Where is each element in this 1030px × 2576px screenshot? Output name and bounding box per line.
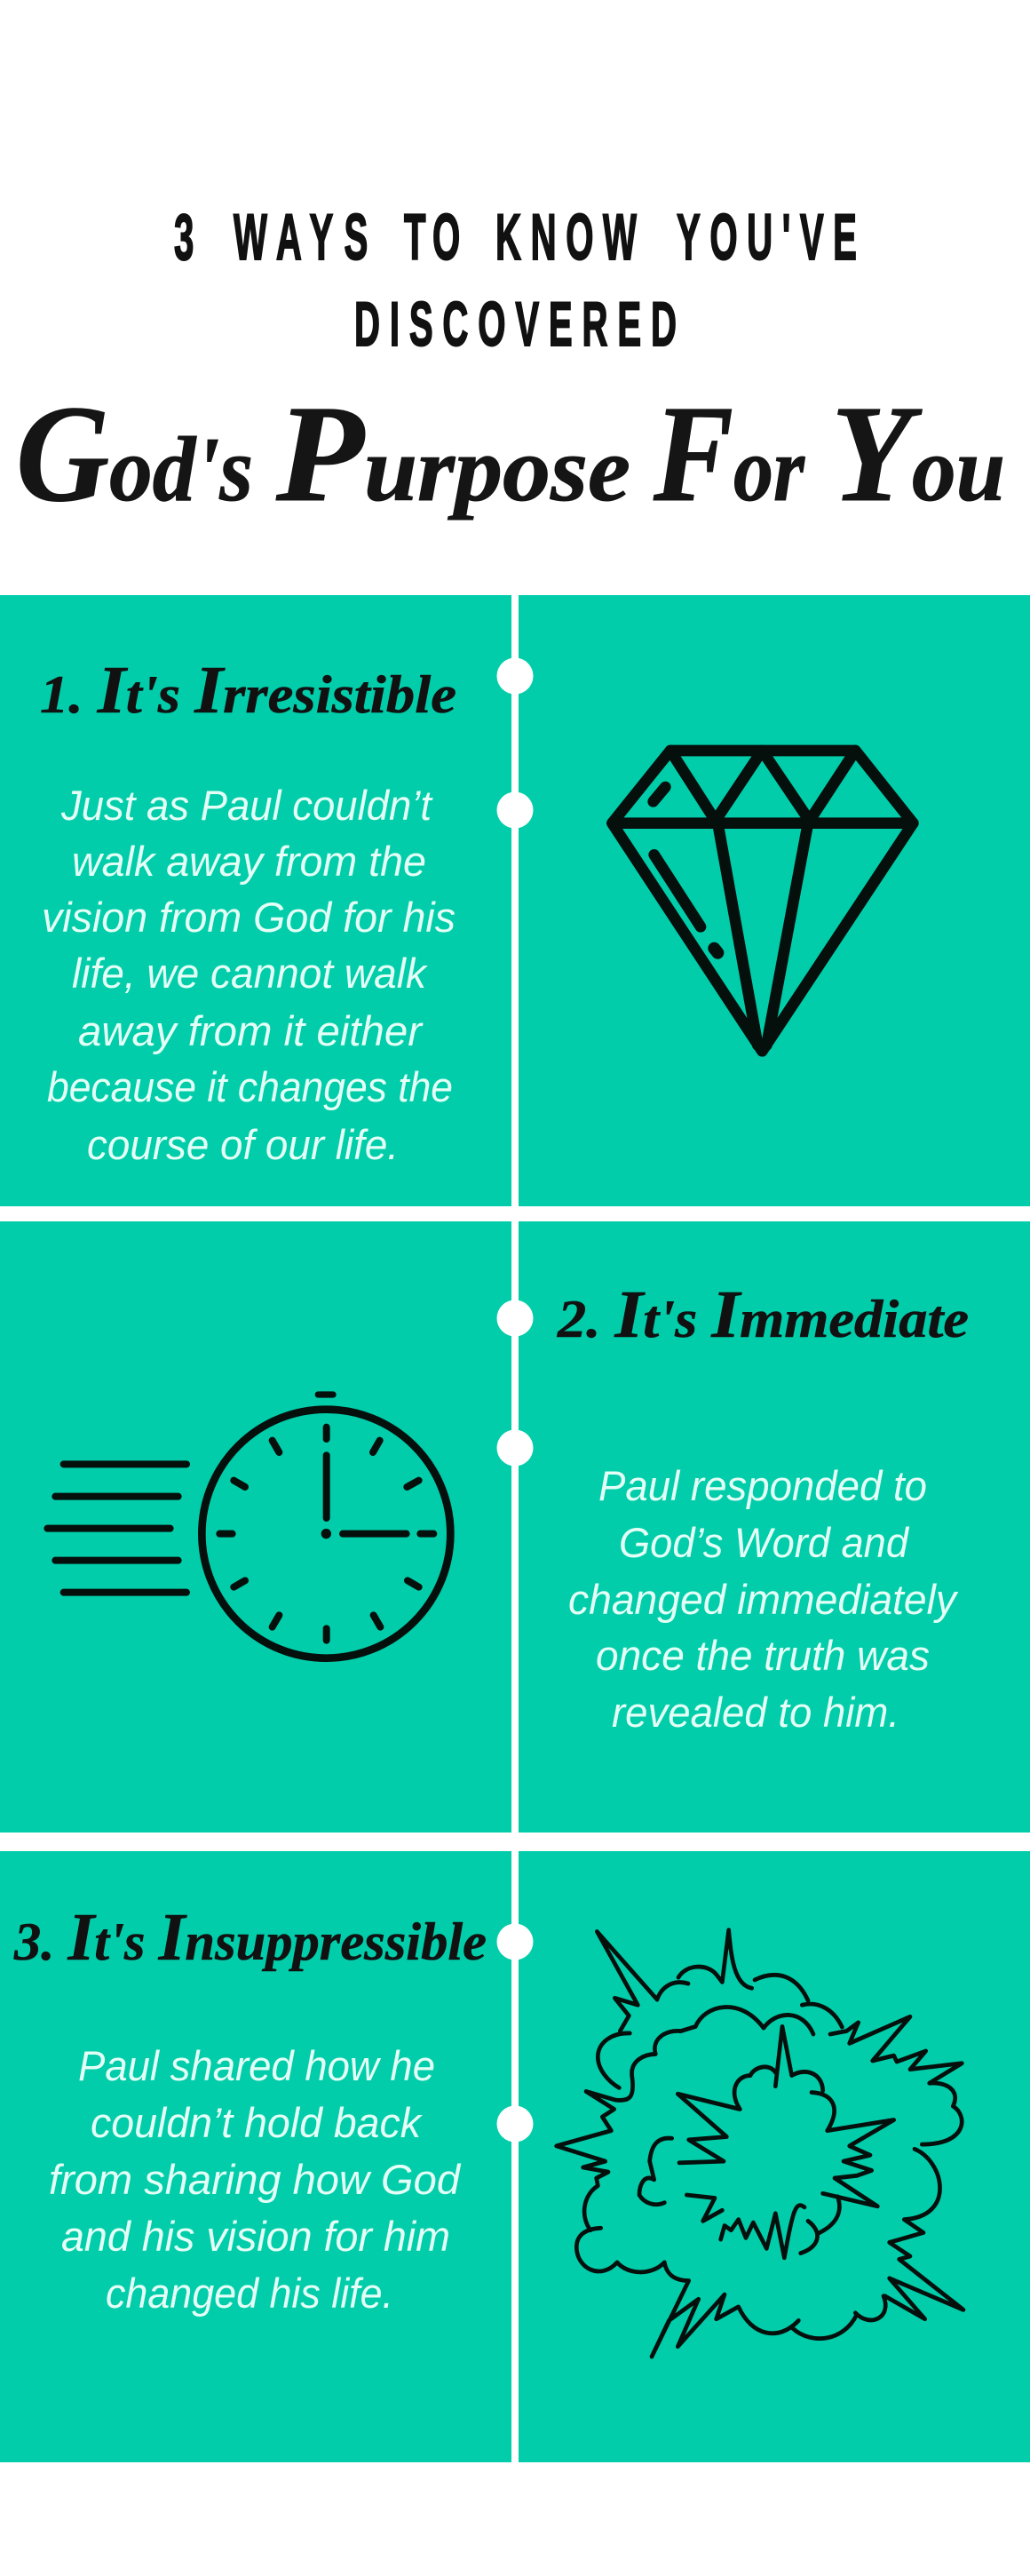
heading: it's irresistible: 1. It's Irresistible [40,653,456,727]
body text: walk away from the [72,838,426,885]
script title: For [653,377,805,530]
body text [49,2042,462,2317]
body text: life, we cannot walk [72,950,428,997]
dot [497,1430,533,1466]
panel background right [519,595,1030,1206]
panel: 1 irresistible [0,595,1030,1206]
body text [42,782,456,1168]
title line 1: WAYS [234,203,368,274]
body text: couldn’t hold back [91,2099,423,2146]
panel background left [0,1221,511,1833]
timeline divider with dots [497,595,533,2462]
title [16,203,1005,530]
body text: God’s Word and [619,1519,910,1566]
panel: 3 insuppressible [0,1851,1030,2462]
panel background right [519,1221,1030,1833]
body text: because it changes the [47,1063,453,1110]
title line 1 [174,203,857,274]
dot [497,657,533,695]
body text: Just as Paul couldn’t [60,782,433,829]
title line 1: KNOW [495,203,637,274]
body text: from sharing how God [49,2156,462,2203]
body text: changed his life. [106,2270,393,2317]
script title [16,377,1005,530]
dot [497,792,533,828]
body text: Paul shared how he [78,2042,435,2089]
dot [497,1924,533,1960]
body text: away from it either [78,1007,424,1054]
heading: it's immediate: 2. It's Immediate [557,1277,969,1352]
body text: and his vision for him [61,2213,450,2260]
panel: 2 immediate [0,1221,1030,1833]
title line 1: 3 [174,203,194,274]
panel background left [0,1851,511,2462]
body text [568,1462,958,1736]
dot [497,2105,533,2143]
icon: explosion [557,1930,963,2357]
body text: Paul responded to [598,1462,927,1509]
icon: stopwatch with speed lines [47,1395,450,1658]
body text: changed immediately [568,1576,958,1623]
icon: diamond [612,751,913,1051]
body text: revealed to him. [612,1689,899,1736]
body text: once the truth was [596,1632,930,1679]
title line 2: DISCOVERED [354,290,677,360]
body text: course of our life. [87,1121,399,1168]
script title: God's [16,377,253,530]
script title: Purpose [275,377,630,530]
title line 1: YOU'VE [677,203,857,274]
panel background right [519,1851,1030,2462]
title line 1: TO [404,203,460,274]
heading: it's insuppressible: 3. It's Insuppressible [13,1900,487,1975]
dot [497,1300,533,1336]
panel background left [0,595,511,1206]
script title: You [831,377,1005,530]
body text: vision from God for his [42,894,456,941]
